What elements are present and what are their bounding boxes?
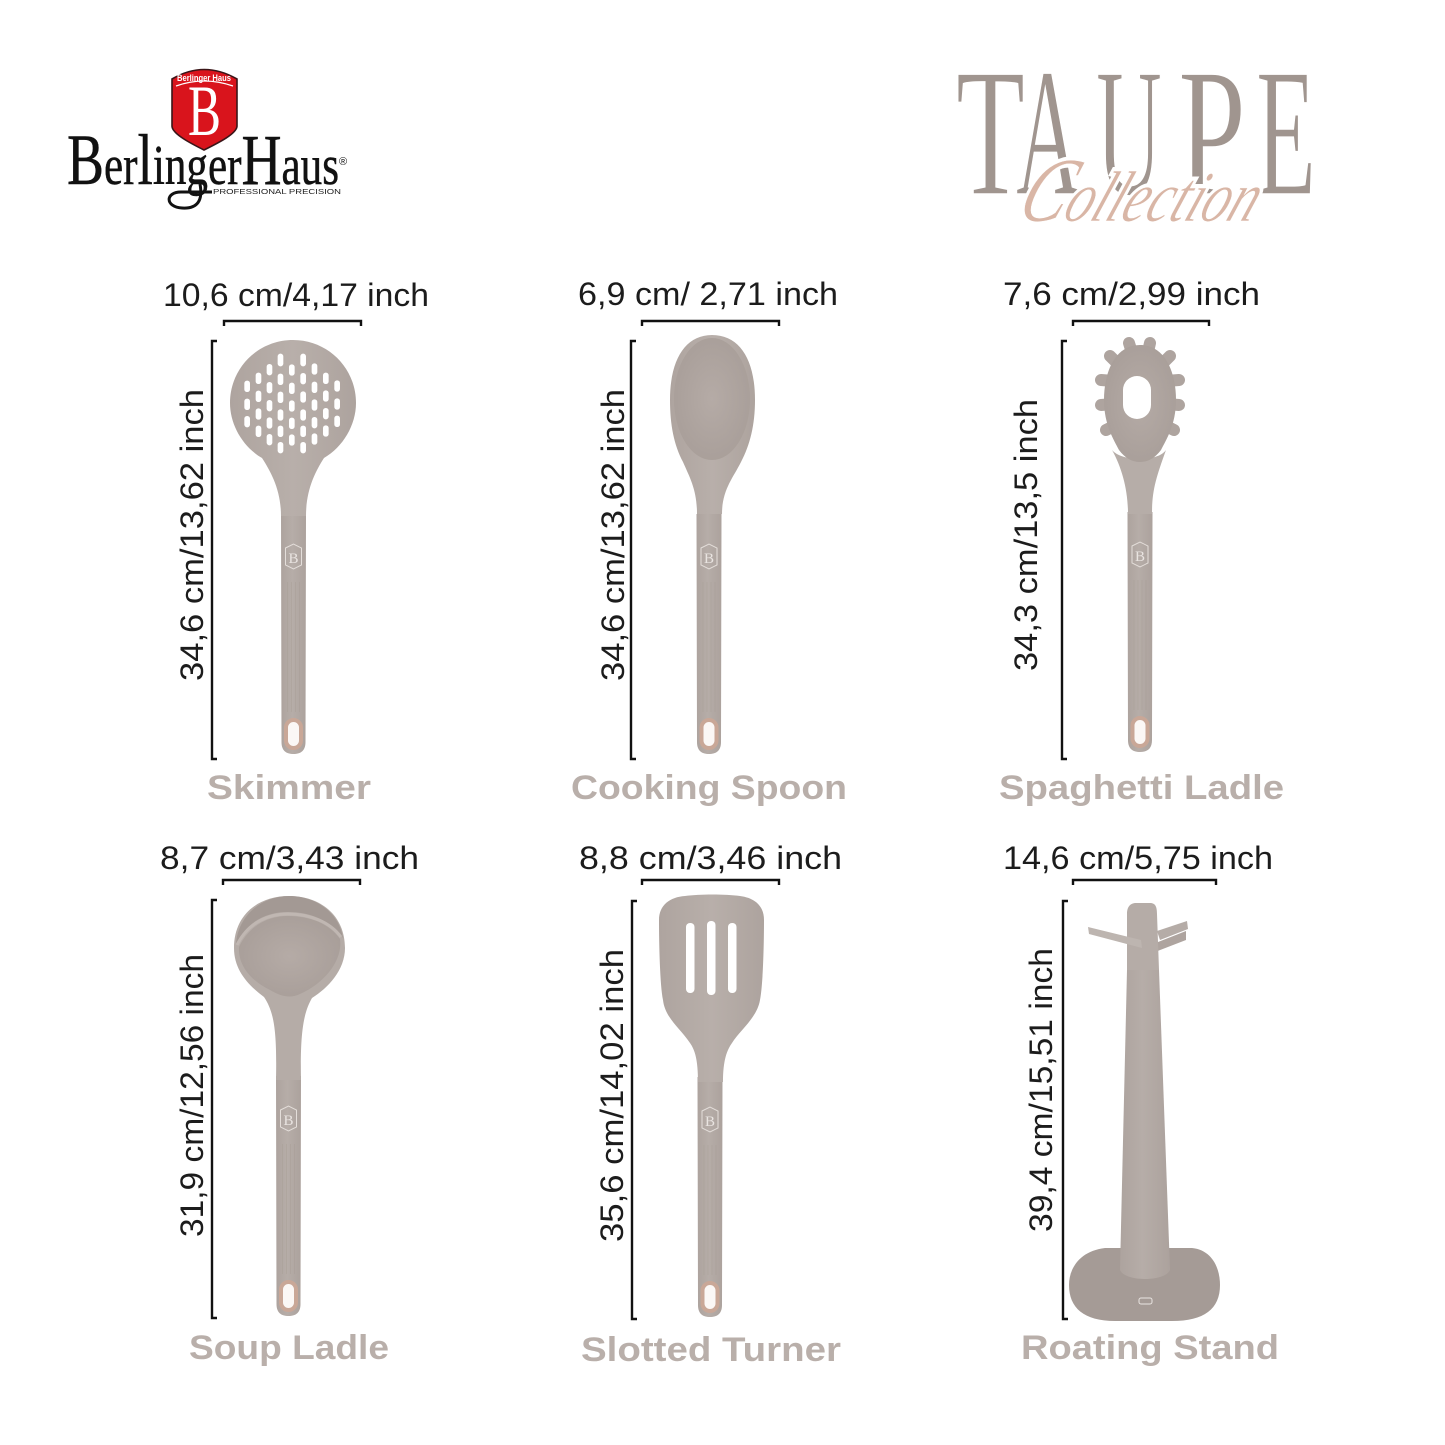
width bracket	[224, 321, 361, 326]
width label: 10,6 cm/4,17 inch	[163, 277, 429, 313]
width bracket	[642, 880, 779, 885]
skimmer utensil	[230, 340, 356, 754]
name: Spaghetti Ladle: Spaghetti Ladle	[999, 769, 1284, 807]
tagline: PROFESSIONAL PRECISION	[213, 187, 341, 196]
width bracket	[1073, 321, 1209, 326]
height label: 34,6 cm/13,62 inch	[174, 389, 210, 681]
wordmark descender swirl	[169, 184, 212, 208]
soup ladle utensil	[234, 896, 345, 1316]
icon: red shield: B	[188, 71, 221, 151]
height bracket	[212, 900, 217, 1318]
icon: red shield: Berlinger Haus	[177, 73, 231, 83]
height label: 39,4 cm/15,51 inch	[1023, 948, 1059, 1232]
wordmark: BerlingerHaus	[67, 120, 339, 200]
panel: spaghetti ladle	[999, 276, 1284, 807]
name: Roating Stand: Roating Stand	[1021, 1329, 1279, 1367]
name: Skimmer: Skimmer	[207, 769, 371, 807]
width label: 8,8 cm/3,46 inch	[579, 840, 842, 876]
script overlay halo: Collection	[1006, 139, 1284, 241]
width bracket	[1073, 880, 1216, 885]
height bracket	[1063, 901, 1068, 1319]
heading letters: U	[1096, 31, 1162, 234]
spaghetti ladle utensil	[1101, 343, 1179, 752]
panel: skimmer	[163, 277, 429, 807]
name: Soup Ladle: Soup Ladle	[189, 1329, 389, 1367]
height bracket	[212, 341, 217, 759]
stand object	[1069, 903, 1220, 1321]
height label: 31,9 cm/12,56 inch	[174, 954, 210, 1237]
logo: Berlinger Haus	[67, 70, 347, 208]
heading letters	[956, 31, 1316, 234]
width bracket	[223, 880, 360, 885]
height bracket	[631, 341, 636, 759]
heading letters: A	[1016, 31, 1080, 234]
script overlay: Collection	[1006, 139, 1284, 241]
panel: cooking spoon	[571, 276, 847, 807]
height bracket	[632, 901, 637, 1319]
panel: rotating stand	[1003, 840, 1279, 1367]
heading letters: E	[1256, 31, 1316, 234]
panel: slotted turner	[579, 840, 842, 1369]
panel: soup ladle	[160, 840, 419, 1367]
width bracket	[642, 321, 779, 326]
spoon utensil	[670, 335, 755, 754]
height label: 34,3 cm/13,5 inch	[1008, 399, 1044, 671]
registered mark: ®	[339, 156, 347, 168]
width label: 6,9 cm/ 2,71 inch	[578, 276, 838, 312]
collection title: Taupe Collection	[956, 31, 1316, 241]
width label: 7,6 cm/2,99 inch	[1003, 276, 1260, 312]
width label: 8,7 cm/3,43 inch	[160, 840, 419, 876]
name: Cooking Spoon: Cooking Spoon	[571, 769, 847, 807]
heading letters: P	[1178, 31, 1246, 234]
width label: 14,6 cm/5,75 inch	[1003, 840, 1273, 876]
turner utensil	[659, 894, 764, 1317]
height bracket	[1062, 341, 1067, 759]
heading letters: T	[956, 31, 1025, 234]
name: Slotted Turner: Slotted Turner	[581, 1331, 841, 1369]
height label: 34,6 cm/13,62 inch	[595, 389, 631, 681]
height label: 35,6 cm/14,02 inch	[594, 949, 630, 1242]
